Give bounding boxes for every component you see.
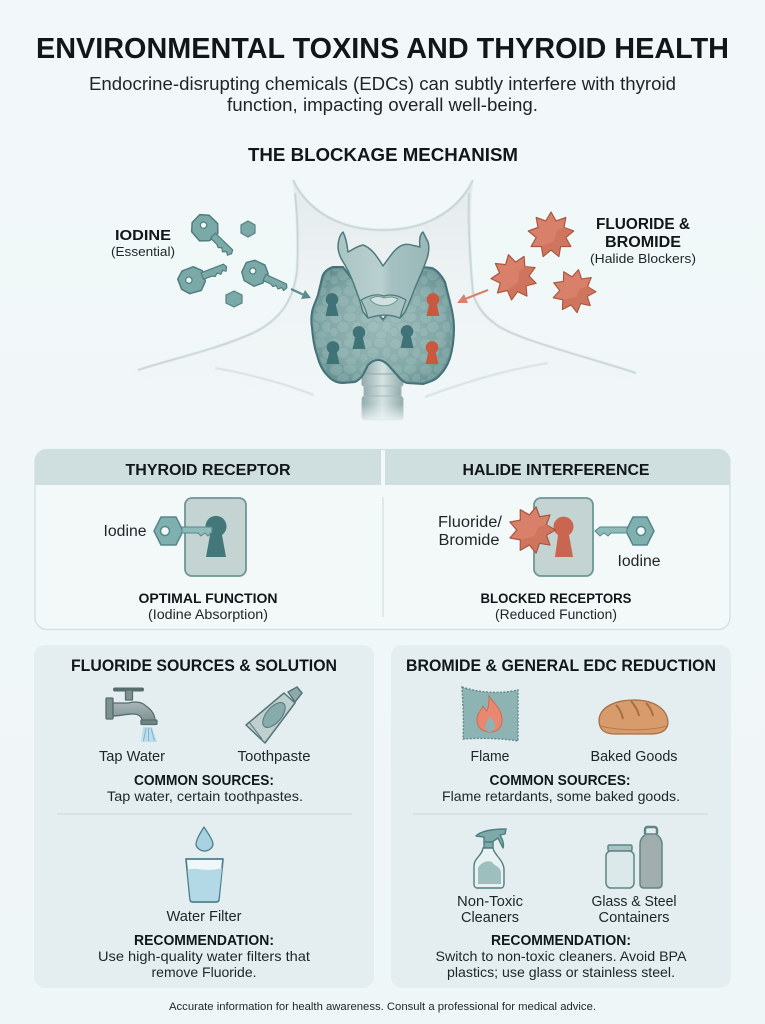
label: iodine: Iodine [618,553,660,570]
arrow: blockers into gland [457,290,488,303]
label: iodine [111,228,175,259]
text: common sources: COMMON SOURCES: [134,773,274,789]
icons: halide blocker stars [486,212,600,316]
label: fluoride/bromide: Fluoride/ [438,514,503,531]
blocked keyholes [426,293,440,364]
thyroid cartilage [338,232,429,318]
panel: fluoride sources and solution [34,645,374,988]
caption: optimal function: (Iodine Absorption) [148,607,268,622]
label: iodine: (Essential) [111,244,175,259]
label: fluoride and bromide: (Halide Blockers) [590,251,696,266]
heading: the blockage mechanism: THE BLOCKAGE MECHANISM [248,145,518,165]
label: fluoride/bromide [438,514,503,549]
arrow: iodine into gland [291,289,311,299]
text: recommendation: Switch to non-toxic cleaners. Avoid BPA [436,948,687,964]
icons: iodine hexagons [226,221,255,307]
label: non-toxic cleaners: Non-Toxic [457,893,523,910]
label: flame: Flame [470,748,510,765]
keyholes [326,293,414,364]
caption: optimal function: OPTIMAL FUNCTION [138,591,278,606]
text: common sources: Flame retardants, some baked goods. [442,788,680,804]
icon: spray bottle [474,829,506,888]
label: toothpaste: Toothpaste [238,748,310,765]
text: common sources [442,773,680,804]
icon: water drop and glass [186,827,223,902]
caption: blocked receptors [480,591,632,622]
text: recommendation: RECOMMENDATION: [134,933,274,949]
label: iodine: Iodine [104,523,146,540]
heading: FLUORIDE SOURCES & SOLUTION [71,656,337,675]
title: ENVIRONMENTAL TOXINS AND THYROID HEALTH [36,33,729,65]
label: non-toxic cleaners: Cleaners [461,909,519,926]
heading: BROMIDE & GENERAL EDC REDUCTION [406,656,716,675]
caption: optimal function [138,591,278,622]
label: fluoride and bromide: BROMIDE [605,234,681,251]
header: halide interference [385,449,730,485]
icon: tap [106,690,157,742]
header: thyroid receptor [35,449,381,485]
gland lobes [311,267,454,384]
label: baked goods: Baked Goods [590,748,678,765]
icon: toothpaste [246,687,302,743]
label: glass and steel containers: Containers [598,909,670,926]
label: non-toxic cleaners [457,893,523,926]
subtitle [89,74,676,115]
trachea [358,360,407,424]
label: glass and steel containers [592,893,676,926]
illustration: neck [130,180,640,440]
illustration: thyroid gland [311,232,454,424]
icons: iodine keys [176,210,292,299]
label: tap water: Tap Water [99,748,165,765]
label: water filter: Water Filter [166,908,242,925]
icon: optimal receptor [154,498,246,576]
text: recommendation: Use high-quality water filters that [98,948,310,964]
label: fluoride and bromide: FLUORIDE & [596,216,690,233]
panel: receptor comparison [35,449,730,630]
text: common sources: Tap water, certain toothpastes. [107,788,303,804]
subtitle: function, impacting overall well-being. [227,95,538,115]
icon: glass jar and steel bottle [606,827,662,888]
label: fluoride/bromide: Bromide [438,532,500,549]
label: iodine: IODINE [115,228,171,244]
header: halide interference: HALIDE INTERFERENCE [462,462,650,479]
text: recommendation [98,933,310,980]
text: recommendation: plastics; use glass or stainless steel. [447,964,675,980]
text: common sources [107,773,303,804]
text: recommendation: RECOMMENDATION: [491,933,631,949]
icon: bread [599,700,668,734]
panel: bromide and general edc reduction [391,645,731,988]
caption: blocked receptors: (Reduced Function) [495,607,617,622]
icon: blocked receptor [505,498,654,576]
caption: blocked receptors: BLOCKED RECEPTORS [480,591,632,606]
text: common sources: COMMON SOURCES: [490,773,630,789]
icon: flame retardant fabric [462,687,518,741]
footer: Accurate information for health awareness. Consult a professional for medical advice. [169,1001,596,1013]
label: fluoride and bromide [590,216,696,266]
label: glass and steel containers: Glass & Steel [592,893,676,910]
text: recommendation: remove Fluoride. [152,964,256,980]
header: thyroid receptor: THYROID RECEPTOR [126,462,291,479]
text: recommendation [436,933,687,980]
subtitle: Endocrine-disrupting chemicals (EDCs) can subtly interfere with thyroid [89,74,676,94]
